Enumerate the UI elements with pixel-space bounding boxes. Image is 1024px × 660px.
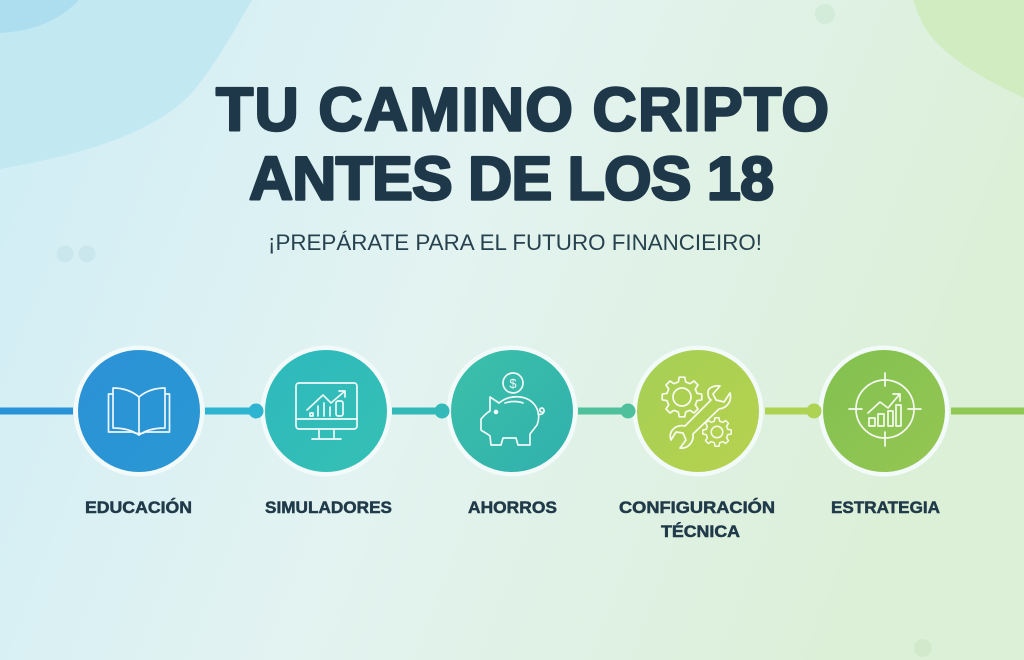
step 5: estrategia xyxy=(818,346,950,517)
icon: target with chart xyxy=(849,373,921,446)
timeline connectors xyxy=(0,404,1024,418)
label: AHORROS xyxy=(468,498,557,517)
label line 2: TÉCNICA xyxy=(661,522,740,541)
node circle 5 xyxy=(818,346,950,476)
title line 2: ANTES DE LOS 18 xyxy=(249,144,774,212)
icon: monitor with chart xyxy=(296,383,357,439)
label: ESTRATEGIA xyxy=(831,498,940,517)
icon: gears and wrench xyxy=(662,377,731,448)
icon: open book xyxy=(108,388,170,435)
subtitle: ¡PREPÁRATE PARA EL FUTURO FINANCIEIRO! xyxy=(268,230,762,255)
label: CONFIGURACIÓN xyxy=(619,498,775,517)
node circle 4 xyxy=(632,346,764,476)
blob: top right xyxy=(913,0,1024,98)
step 2: simuladores xyxy=(260,346,392,517)
step 4: configuración técnica xyxy=(619,346,775,541)
label: EDUCACIÓN xyxy=(85,498,192,517)
blob: top left corner xyxy=(0,0,79,33)
step 1: educación xyxy=(74,346,204,517)
node circle 2 xyxy=(260,346,392,476)
blob: top left large xyxy=(0,0,252,169)
node circle 1 xyxy=(74,346,204,476)
icon: piggy bank with coin: $ xyxy=(509,376,517,391)
title line 1: TU CAMINO CRIPTO xyxy=(216,76,829,144)
icon: piggy bank with coin xyxy=(481,373,544,445)
label: SIMULADORES xyxy=(265,498,392,517)
title xyxy=(216,76,829,212)
node circle 3 xyxy=(446,346,578,476)
step 3: ahorros xyxy=(446,346,578,517)
